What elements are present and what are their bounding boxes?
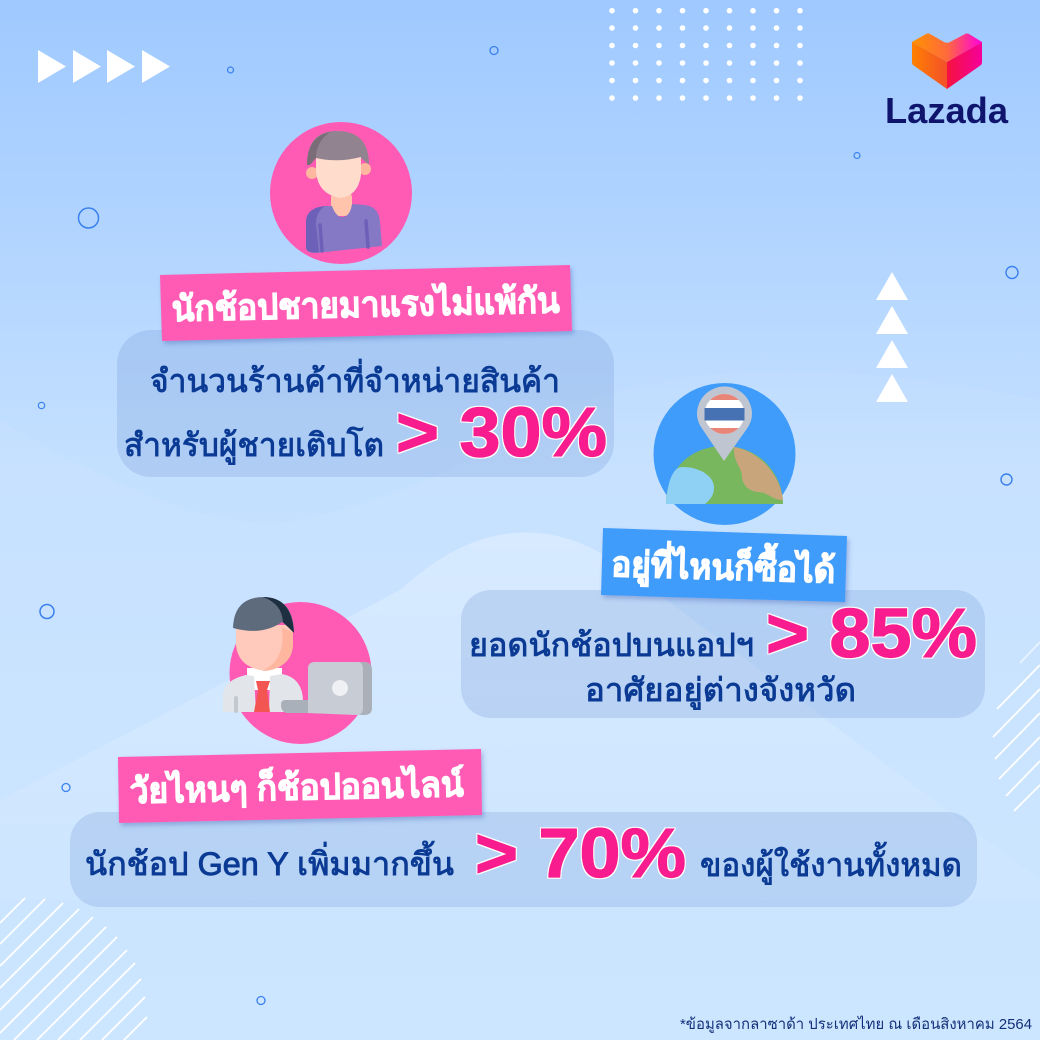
panel background bbox=[117, 330, 614, 477]
stat: over 70 percent: > 70% bbox=[475, 814, 686, 892]
body text line 1: ยอดนักช้อปบนแอปฯ bbox=[469, 627, 754, 663]
stat: over 85 percent: > 85% bbox=[766, 594, 977, 672]
decoration: arrow row bbox=[38, 50, 170, 83]
icon: office worker with laptop bbox=[223, 597, 372, 744]
decoration: triangle column bbox=[876, 272, 908, 402]
footnote: *ข้อมูลจากลาซาด้า ประเทศไทย ณ เดือนสิงหาคม 2564 bbox=[680, 1015, 1032, 1033]
panel: male shoppers bbox=[117, 122, 614, 477]
logo wordmark: Lazada bbox=[885, 90, 1009, 131]
panel background bbox=[70, 812, 977, 907]
panel: provinces bbox=[461, 383, 985, 718]
decoration: dot grid bbox=[609, 8, 803, 101]
body text line 1: จำนวนร้านค้าที่จำหน่ายสินค้า bbox=[150, 359, 560, 399]
icon: man in purple shirt bbox=[270, 122, 412, 264]
heading banner bbox=[601, 528, 847, 602]
body text right: ของผู้ใช้งานทั้งหมด bbox=[700, 842, 962, 885]
decoration: hatch right bbox=[993, 642, 1040, 811]
body text line 2: อาศัยอยู่ต่างจังหวัด bbox=[585, 672, 856, 710]
panel background bbox=[461, 590, 985, 718]
panel: all ages bbox=[70, 597, 977, 907]
icon: Lazada heart bbox=[912, 34, 982, 89]
heading banner: วัยไหนๆ ก็ช้อปออนไลน์ bbox=[129, 762, 464, 811]
decoration: hatch bottom left bbox=[0, 898, 147, 1040]
body text line 2: สำหรับผู้ชายเติบโต bbox=[124, 427, 384, 465]
logo: Lazada bbox=[885, 34, 1009, 131]
icon: map pin on globe with Thai flag bbox=[654, 383, 796, 525]
heading banner: นักช้อปชายมาแรงไม่แพ้กัน bbox=[171, 279, 560, 329]
body text left: นักช้อป Gen Y เพิ่มมากขึ้น bbox=[85, 841, 454, 882]
heading banner: อยู่ที่ไหนก็ซื้อได้ bbox=[611, 538, 836, 593]
stat: over 30 percent: > 30% bbox=[396, 393, 607, 471]
heading banner bbox=[118, 749, 482, 823]
heading banner bbox=[160, 265, 572, 341]
